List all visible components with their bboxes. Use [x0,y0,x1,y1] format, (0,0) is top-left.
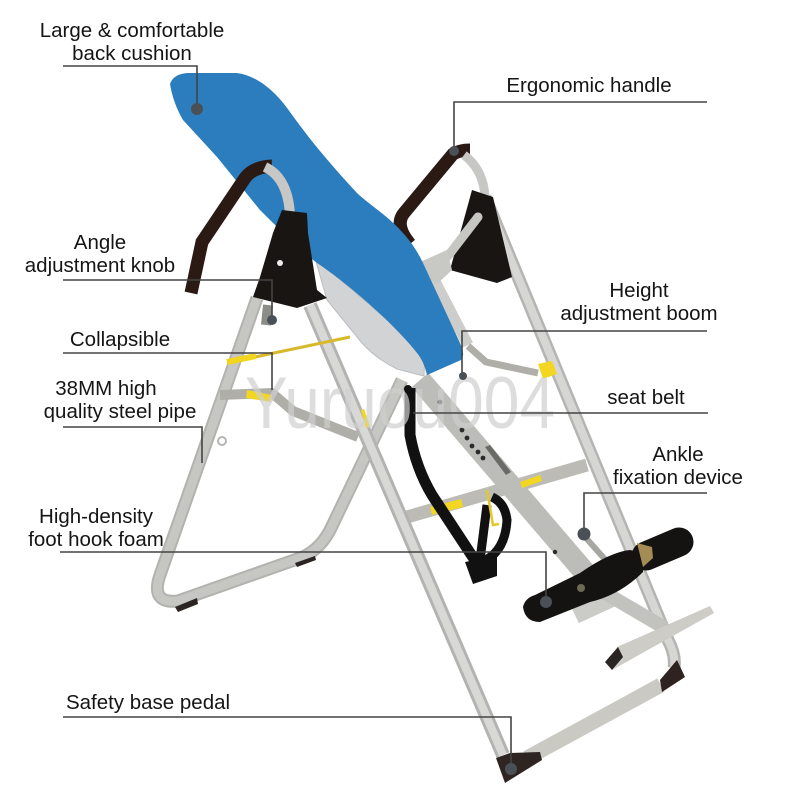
silver peg and bracket [448,217,478,256]
right hinge cover [450,190,512,283]
label: back cushion: Large & comfortable [40,19,224,42]
yellow collapsible bar and markers [227,337,557,515]
label: back cushion [40,19,224,115]
knob under left cover [266,305,268,325]
adjustment holes and plate [438,400,557,554]
label: safety base pedal [63,691,517,775]
pedal bar [612,606,714,670]
inversion table illustration [157,73,714,783]
label: foot hook foam: foot hook foam [28,528,164,551]
label: collapsible [63,328,272,390]
label: ergonomic handle [449,74,707,156]
seat belt [410,388,507,565]
label: steel pipe [44,377,202,463]
ring [218,437,226,445]
label: angle adjustment knob: adjustment knob [25,254,175,277]
ankle rod and knob [586,538,610,565]
label: steel pipe: quality steel pipe [44,400,196,423]
label: ankle fixation device [578,443,743,540]
left hinge cover [253,210,327,308]
blue back cushion [170,73,463,375]
foot caps [175,556,623,670]
rear frame tubes [157,197,674,758]
label: steel pipe: 38MM high [55,377,157,400]
right handle [400,150,470,244]
label: back cushion: back cushion [72,42,192,65]
left handle [191,166,272,293]
label: foot hook foam [28,505,552,608]
label: angle adjustment knob: Angle [74,231,126,254]
label: ergonomic handle: Ergonomic handle [506,74,672,97]
label: height adjustment boom: Height [609,279,669,302]
label: ankle fixation device: Ankle [652,443,704,466]
label: foot hook foam: High-density [39,505,154,528]
label: seat belt: seat belt [607,386,685,409]
label: angle adjustment knob [25,231,277,325]
watermark: Yuruou004 [245,363,555,444]
label: height adjustment boom: adjustment boom [560,302,718,325]
label: ankle fixation device: fixation device [613,466,743,489]
foot pads [523,542,679,622]
label: height adjustment boom [459,279,718,380]
label: safety base pedal: Safety base pedal [66,691,230,714]
label: collapsible: Collapsible [70,328,170,351]
silver cushion base [315,258,425,376]
